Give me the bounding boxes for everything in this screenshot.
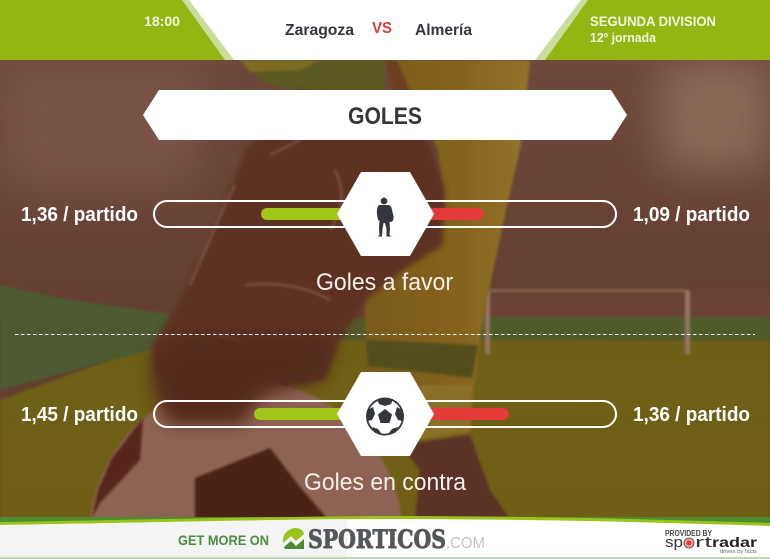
- footer: [0, 516, 770, 559]
- stat row: goles a favor: [21, 172, 750, 296]
- away value: 1,36 / partido: [633, 404, 750, 426]
- wordmark: SPORTICOS: [308, 525, 446, 554]
- sportradar credit: [665, 529, 758, 555]
- hexagon badge: [337, 372, 434, 456]
- stat label: Goles a favor: [316, 269, 453, 296]
- track: [154, 401, 616, 427]
- logo mark: [283, 528, 304, 549]
- section title banner: GOLES: [348, 103, 422, 130]
- dashed divider: [15, 334, 755, 336]
- home team: Zaragoza: [285, 22, 354, 39]
- away bar: [420, 408, 509, 420]
- round: 12º jornada: [590, 31, 657, 45]
- home value: 1,36 / partido: [21, 204, 138, 226]
- away value: 1,09 / partido: [633, 204, 750, 226]
- icon: player silhouette: [377, 198, 394, 236]
- section title banner: [143, 90, 627, 140]
- track: [154, 201, 616, 227]
- versus label: VS: [372, 20, 392, 37]
- call to action: GET MORE ON: [178, 532, 269, 548]
- sportradar credit: PROVIDED BY: [665, 529, 713, 538]
- sportradar credit: driven by facts: [720, 549, 758, 555]
- competition: SEGUNDA DIVISION: [590, 13, 716, 29]
- home value: 1,45 / partido: [21, 404, 138, 426]
- sporticos logo: [283, 525, 485, 554]
- hexagon badge: [337, 172, 434, 256]
- match time: 18:00: [144, 13, 180, 29]
- away team: Almería: [415, 22, 472, 39]
- home bar: [261, 208, 351, 220]
- sportradar credit: radar: [712, 534, 758, 550]
- stat label: Goles en contra: [304, 469, 467, 496]
- header bar: [0, 0, 770, 60]
- home bar: [254, 408, 351, 420]
- domain: .COM: [446, 535, 485, 552]
- sportradar credit: sp: [665, 534, 683, 551]
- icon: football: [366, 398, 404, 436]
- sportradar credit: rt: [695, 534, 714, 551]
- away bar: [420, 208, 484, 220]
- stat row: goles en contra: [21, 372, 750, 496]
